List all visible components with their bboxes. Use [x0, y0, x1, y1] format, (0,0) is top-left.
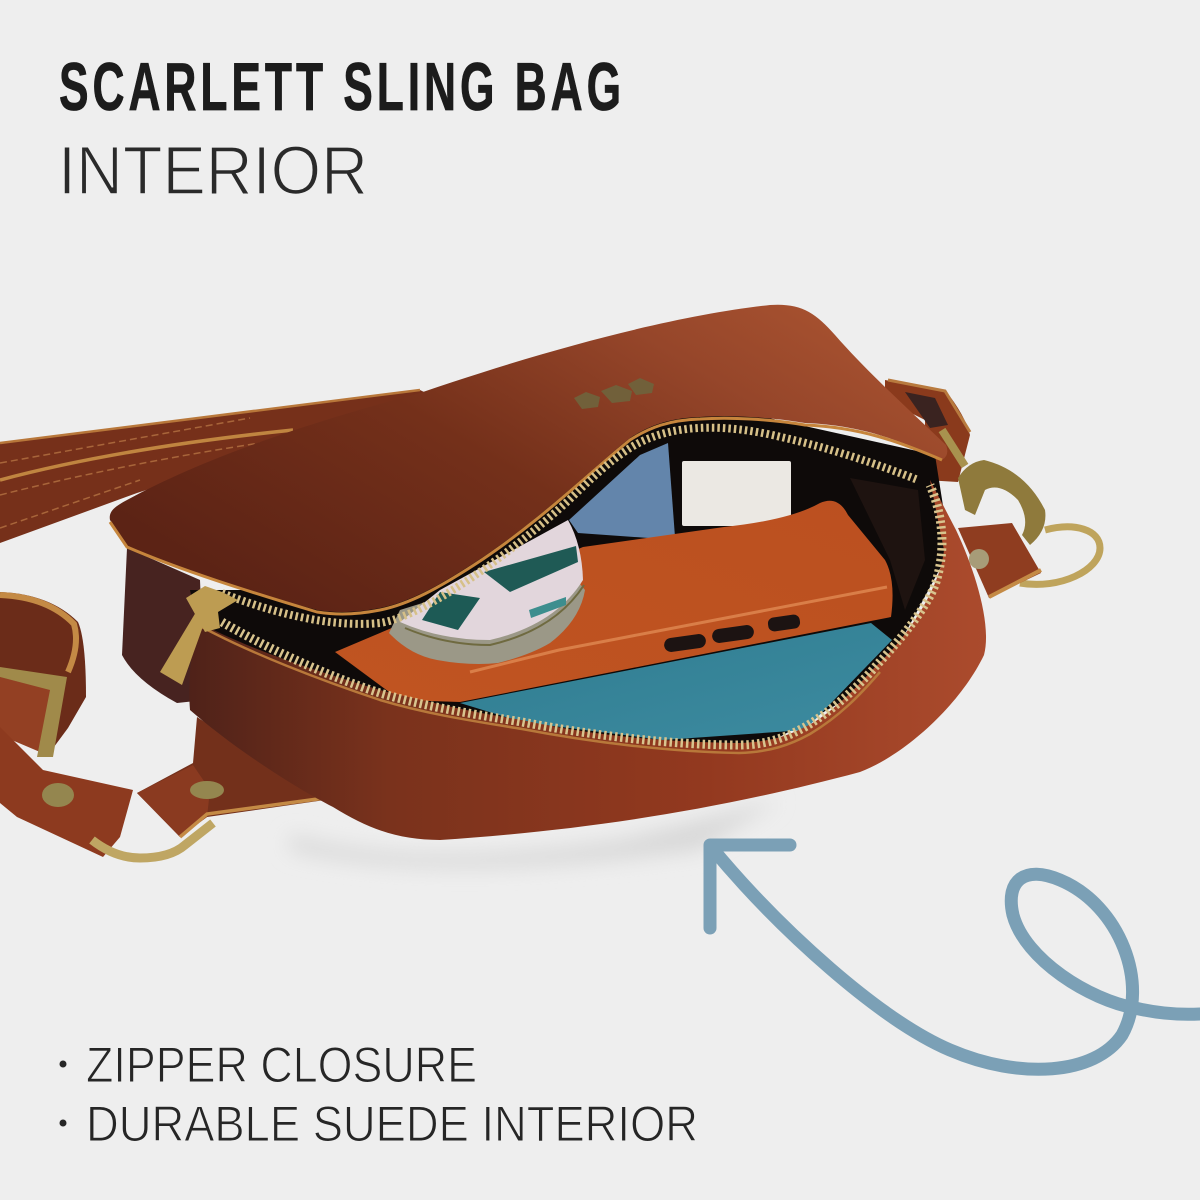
phone buttons: [663, 614, 801, 653]
arrow: [710, 845, 1200, 1069]
round tin: [389, 520, 585, 664]
strap: lower left: [0, 727, 133, 857]
phone: [335, 501, 893, 702]
zipper pull: [160, 586, 238, 685]
feature list: [60, 1037, 698, 1152]
right tab: [958, 523, 1041, 598]
right clasp: [942, 430, 1045, 545]
blue box: [569, 443, 675, 538]
rivets: [42, 781, 224, 807]
flap: [110, 305, 947, 612]
strap: upper left: [0, 390, 440, 543]
right ring: [1020, 527, 1100, 584]
bullet one: [60, 1060, 66, 1068]
interior right wall: [850, 478, 925, 610]
white tube: [682, 461, 791, 526]
bullet two: [60, 1120, 66, 1126]
strap tab lower: [137, 717, 325, 837]
interior dark: [190, 405, 950, 760]
flap tan edge: [110, 418, 942, 614]
title: SCARLETT SLING BAG: [59, 49, 625, 125]
subtitle: INTERIOR: [58, 132, 368, 209]
front tan edge: [200, 626, 880, 753]
buckle: [0, 667, 67, 757]
bag photo illustration: [0, 305, 1100, 868]
lower zipper: [222, 485, 942, 745]
teal notebook: [460, 623, 892, 740]
durable suede interior text: DURABLE SUEDE INTERIOR: [86, 1096, 698, 1152]
front body: [189, 480, 986, 840]
bag back side: [122, 548, 205, 703]
upper zipper: [222, 428, 918, 624]
ground shadow: [290, 800, 780, 868]
logo studs: [574, 378, 654, 409]
ring lower left: [92, 823, 213, 858]
zipper closure text: ZIPPER CLOSURE: [86, 1037, 477, 1093]
strap: left loop: [0, 592, 86, 755]
strap: upper right: [885, 380, 970, 482]
